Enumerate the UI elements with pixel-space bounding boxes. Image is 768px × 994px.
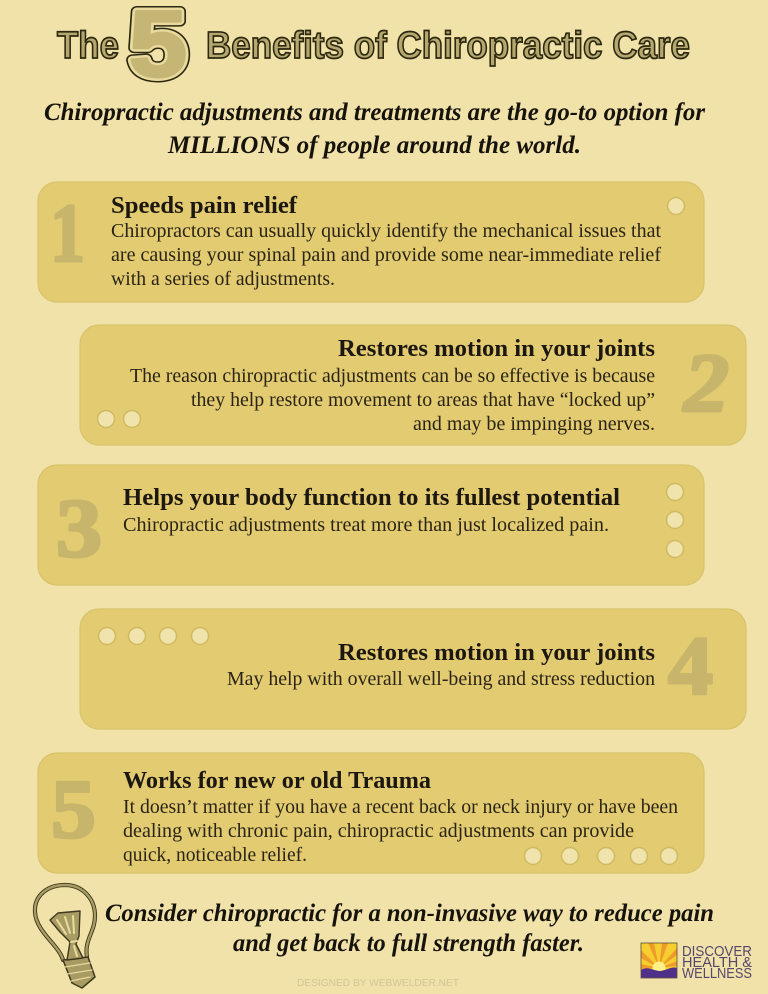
title word: The: The xyxy=(57,25,119,67)
numeral 2: 2 xyxy=(682,337,729,430)
body text: and may be impinging nerves. xyxy=(413,413,655,435)
logo: Discover Health & Wellness xyxy=(641,943,752,982)
body text: May help with overall well-being and stress reduction xyxy=(227,668,655,690)
body text: Chiropractors can usually quickly identify the mechanical issues that xyxy=(111,220,661,242)
closing message xyxy=(105,898,714,957)
closing message: Consider chiropractic for a non-invasive way to reduce pain xyxy=(105,898,714,927)
decorative dot xyxy=(668,198,684,214)
panel: benefit 3 xyxy=(38,465,704,585)
logo wordmark xyxy=(682,943,752,982)
numeral 1: 1 xyxy=(50,187,85,280)
panel: benefit 4 xyxy=(80,609,746,729)
numeral 4: 4 xyxy=(668,620,713,713)
logo mark xyxy=(641,943,677,978)
panel: benefit 1 xyxy=(38,182,704,302)
body text: Chiropractic adjustments treat more than just localized pain. xyxy=(123,514,609,536)
decorative dots xyxy=(666,484,684,558)
body text: dealing with chronic pain, chiropractic adjustments can provide xyxy=(123,820,634,842)
decorative dots xyxy=(524,848,678,864)
decorative dots xyxy=(98,410,140,428)
intro text: Chiropractic adjustments and treatments are the go-to option for xyxy=(44,97,706,126)
logo wordmark: HEALTH & xyxy=(682,954,752,971)
heading: Restores motion in your joints: Restores motion in your joints xyxy=(338,335,655,362)
logo wordmark: DISCOVER xyxy=(682,943,752,960)
intro text xyxy=(44,97,706,159)
numeral 5: 5 xyxy=(51,763,96,856)
title xyxy=(57,0,690,96)
heading: Speeds pain relief: Speeds pain relief xyxy=(111,192,298,219)
body text: are causing your spinal pain and provide some near-immediate relief xyxy=(111,244,661,266)
body text xyxy=(123,796,678,866)
body text: The reason chiropractic adjustments can be so effective is because xyxy=(130,365,655,387)
body text: It doesn’t matter if you have a recent back or neck injury or have been xyxy=(123,796,678,818)
numeral 3: 3 xyxy=(56,482,102,575)
heading: Works for new or old Trauma: Works for new or old Trauma xyxy=(123,767,431,794)
intro text: MILLIONS of people around the world. xyxy=(167,130,581,159)
closing message: and get back to full strength faster. xyxy=(233,928,584,957)
icon: light bulb xyxy=(35,885,95,988)
body text: quick, noticeable relief. xyxy=(123,844,307,866)
decorative dots xyxy=(98,628,208,644)
heading: Helps your body function: Helps your body function to its fullest potential xyxy=(123,484,620,511)
body text xyxy=(111,220,661,290)
panel: benefit 2 xyxy=(80,325,746,445)
body text: with a series of adjustments. xyxy=(111,268,335,290)
body text xyxy=(130,365,655,435)
credit line: DESIGNED BY WEBWELDER.NET xyxy=(297,977,460,989)
body text: they help restore movement to areas that have “locked up” xyxy=(191,389,655,411)
heading: Restores motion in your joints: Restores motion in your joints xyxy=(338,639,655,666)
title words: Benefits of Chiropractic Care: Benefits of Chiropractic Care xyxy=(206,25,690,67)
panel: benefit 5 xyxy=(38,753,704,873)
logo wordmark: WELLNESS xyxy=(682,965,752,982)
